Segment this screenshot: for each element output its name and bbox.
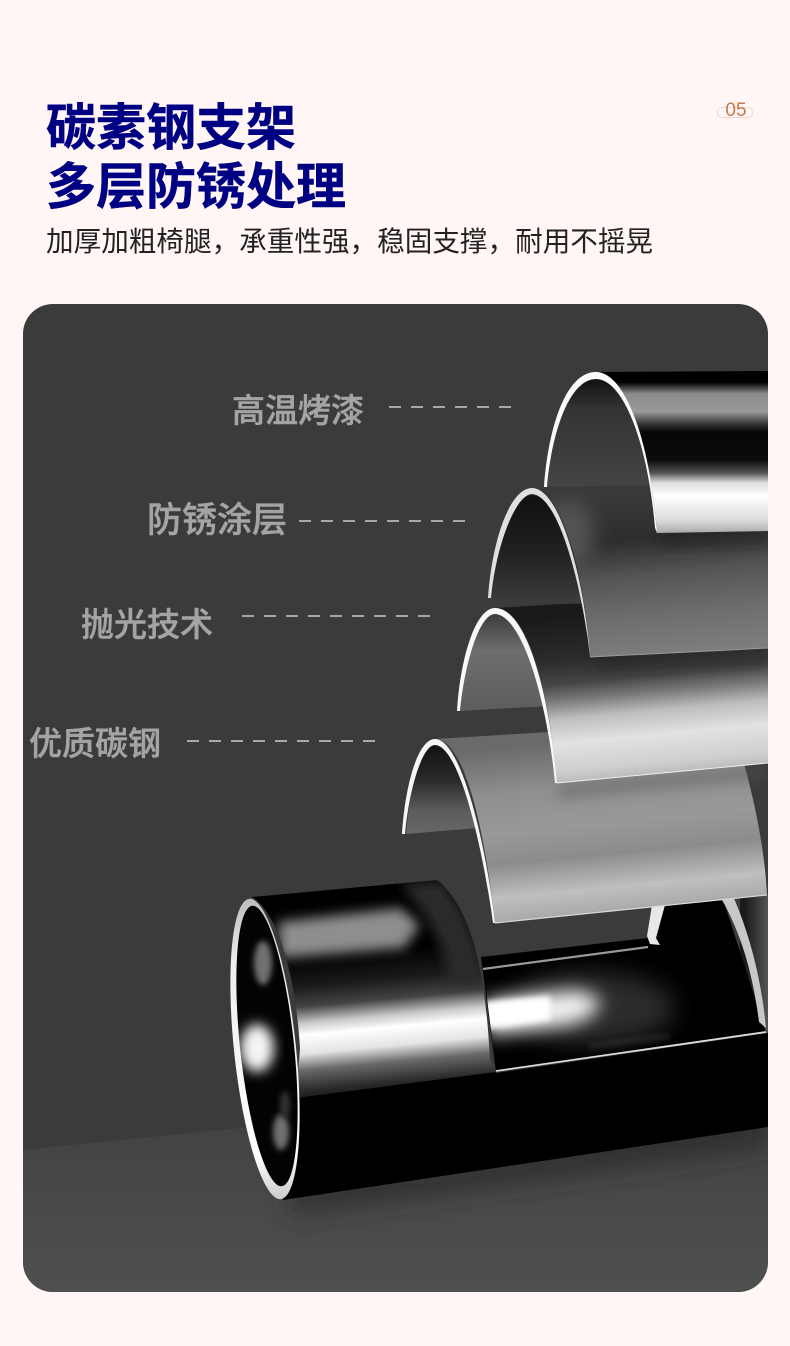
label: baked paint: 高温烤漆 (232, 392, 364, 429)
dashes: quality carbon steel (187, 740, 376, 742)
dashes: polishing (242, 615, 431, 617)
panel background (23, 304, 768, 1292)
layer edge (544, 372, 657, 533)
page number badge (717, 100, 753, 121)
label: anti-rust coating: 防锈涂层 (147, 501, 287, 540)
shadow cast on layer 2 (666, 534, 764, 546)
dashes: baked paint (389, 406, 512, 408)
subtitle: 加厚加粗椅腿，承重性强，稳固支撑，耐用不摇晃 (46, 226, 653, 257)
white arch fragments (647, 896, 766, 1028)
label: polishing: 抛光技术 (81, 606, 213, 643)
shadow cast on layer 3 (604, 653, 764, 670)
label: quality carbon steel: 优质碳钢 (29, 725, 161, 762)
layer edge (457, 608, 557, 783)
title line 2: 多层防锈处理 (46, 159, 346, 215)
lower black tube body (283, 1033, 768, 1200)
title line 1: 碳素钢支架 (46, 100, 296, 156)
tube shadow on floor (286, 1128, 768, 1219)
right strip behind the arch (740, 895, 768, 1035)
steel layer 2: anti-rust coating (488, 484, 768, 657)
layer edge (488, 488, 590, 657)
dashes: anti-rust coating (299, 520, 466, 522)
steel tube (218, 870, 768, 1202)
cutaway interior (480, 896, 766, 1072)
steel layer 4: quality carbon steel (402, 732, 767, 923)
front ring (230, 898, 300, 1200)
steel layer 3: polishing (457, 600, 768, 783)
steel layer 1: baked paint (544, 371, 768, 533)
illustration panel (23, 304, 768, 1292)
shadow cast on layer 4 (557, 766, 768, 798)
floor (23, 1131, 768, 1292)
page number badge: 05 (725, 100, 747, 121)
layer edge (402, 739, 495, 923)
front sleeve (252, 880, 496, 1098)
